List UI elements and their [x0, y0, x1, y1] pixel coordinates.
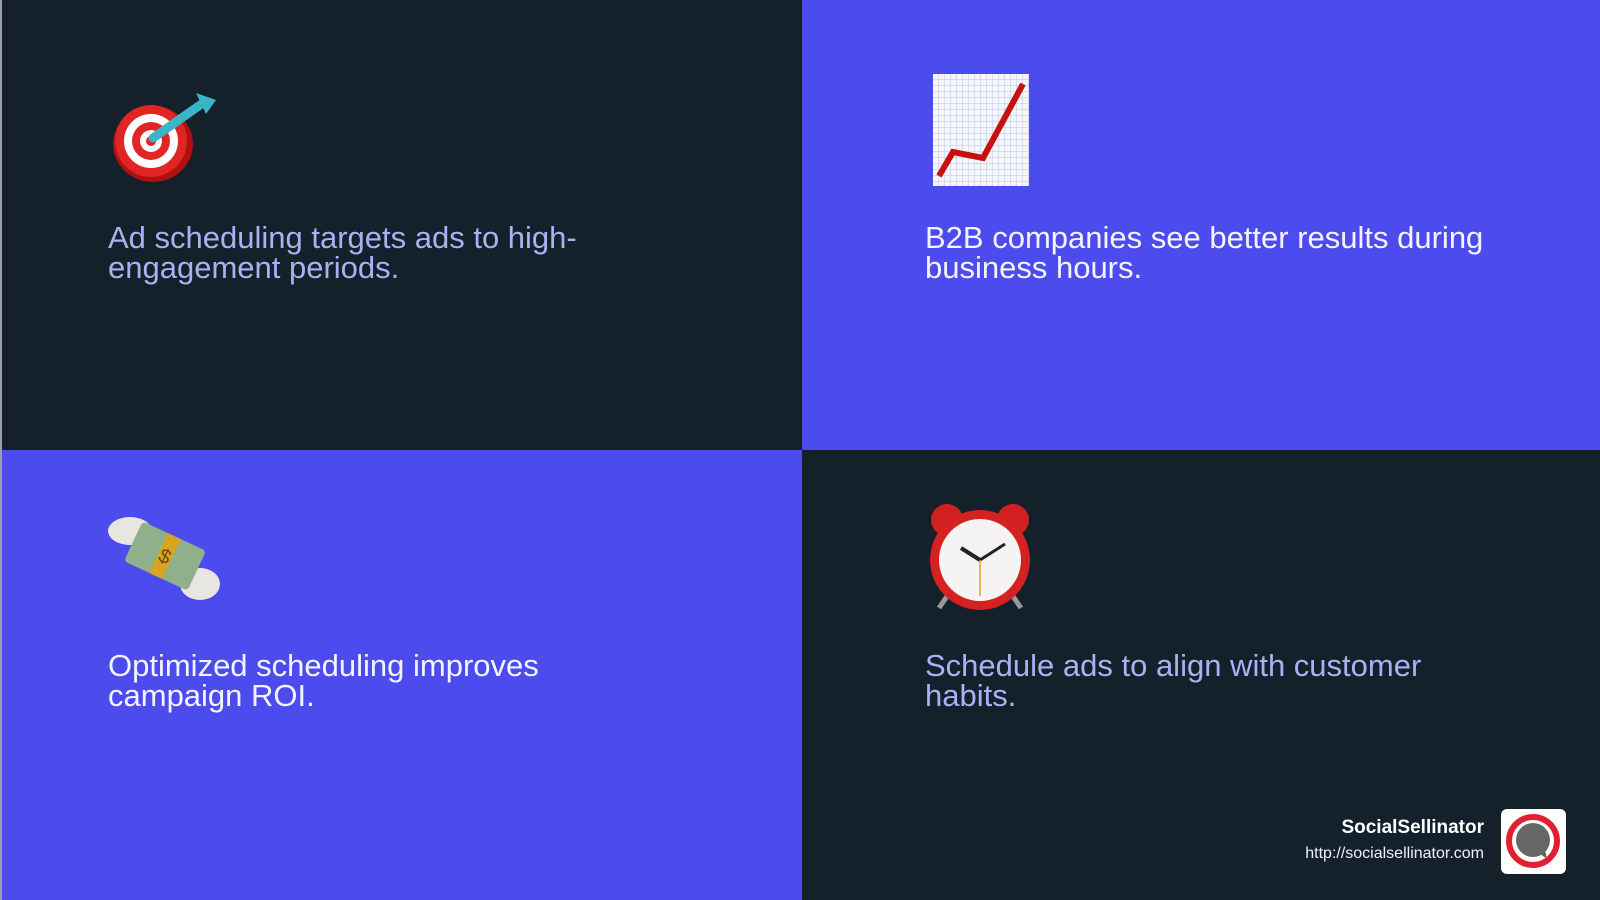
- text: roi: campaign ROI.: [108, 678, 315, 713]
- logo: [1501, 809, 1566, 874]
- text: ad scheduling: Ad scheduling targets ads to high-: [108, 220, 577, 255]
- text: ad scheduling: [108, 220, 577, 285]
- panel: ad scheduling: [2, 0, 802, 450]
- text: ad scheduling: engagement periods.: [108, 250, 399, 285]
- text: b2b: business hours.: [925, 250, 1142, 285]
- text: customer habits: Schedule ads to align with customer: [925, 648, 1421, 683]
- icon: alarm clock: [930, 504, 1030, 610]
- panel: customer habits: [802, 450, 1600, 900]
- panel: roi: [2, 450, 802, 900]
- icon: money with wings: $: [155, 545, 174, 569]
- brand name: SocialSellinator: [1341, 817, 1484, 838]
- brand block: [1305, 809, 1566, 874]
- icon: chart: [933, 74, 1029, 186]
- brand url: http://socialsellinator.com: [1305, 845, 1484, 862]
- text: b2b: [925, 220, 1483, 285]
- text: roi: Optimized scheduling improves: [108, 648, 539, 683]
- text: roi: [108, 648, 539, 713]
- icon: target: [113, 93, 216, 182]
- text: customer habits: [925, 648, 1421, 713]
- text: customer habits: habits.: [925, 678, 1016, 713]
- panel: b2b: [802, 0, 1600, 450]
- text: b2b: B2B companies see better results during: [925, 220, 1483, 255]
- icon: money with wings: [108, 517, 220, 600]
